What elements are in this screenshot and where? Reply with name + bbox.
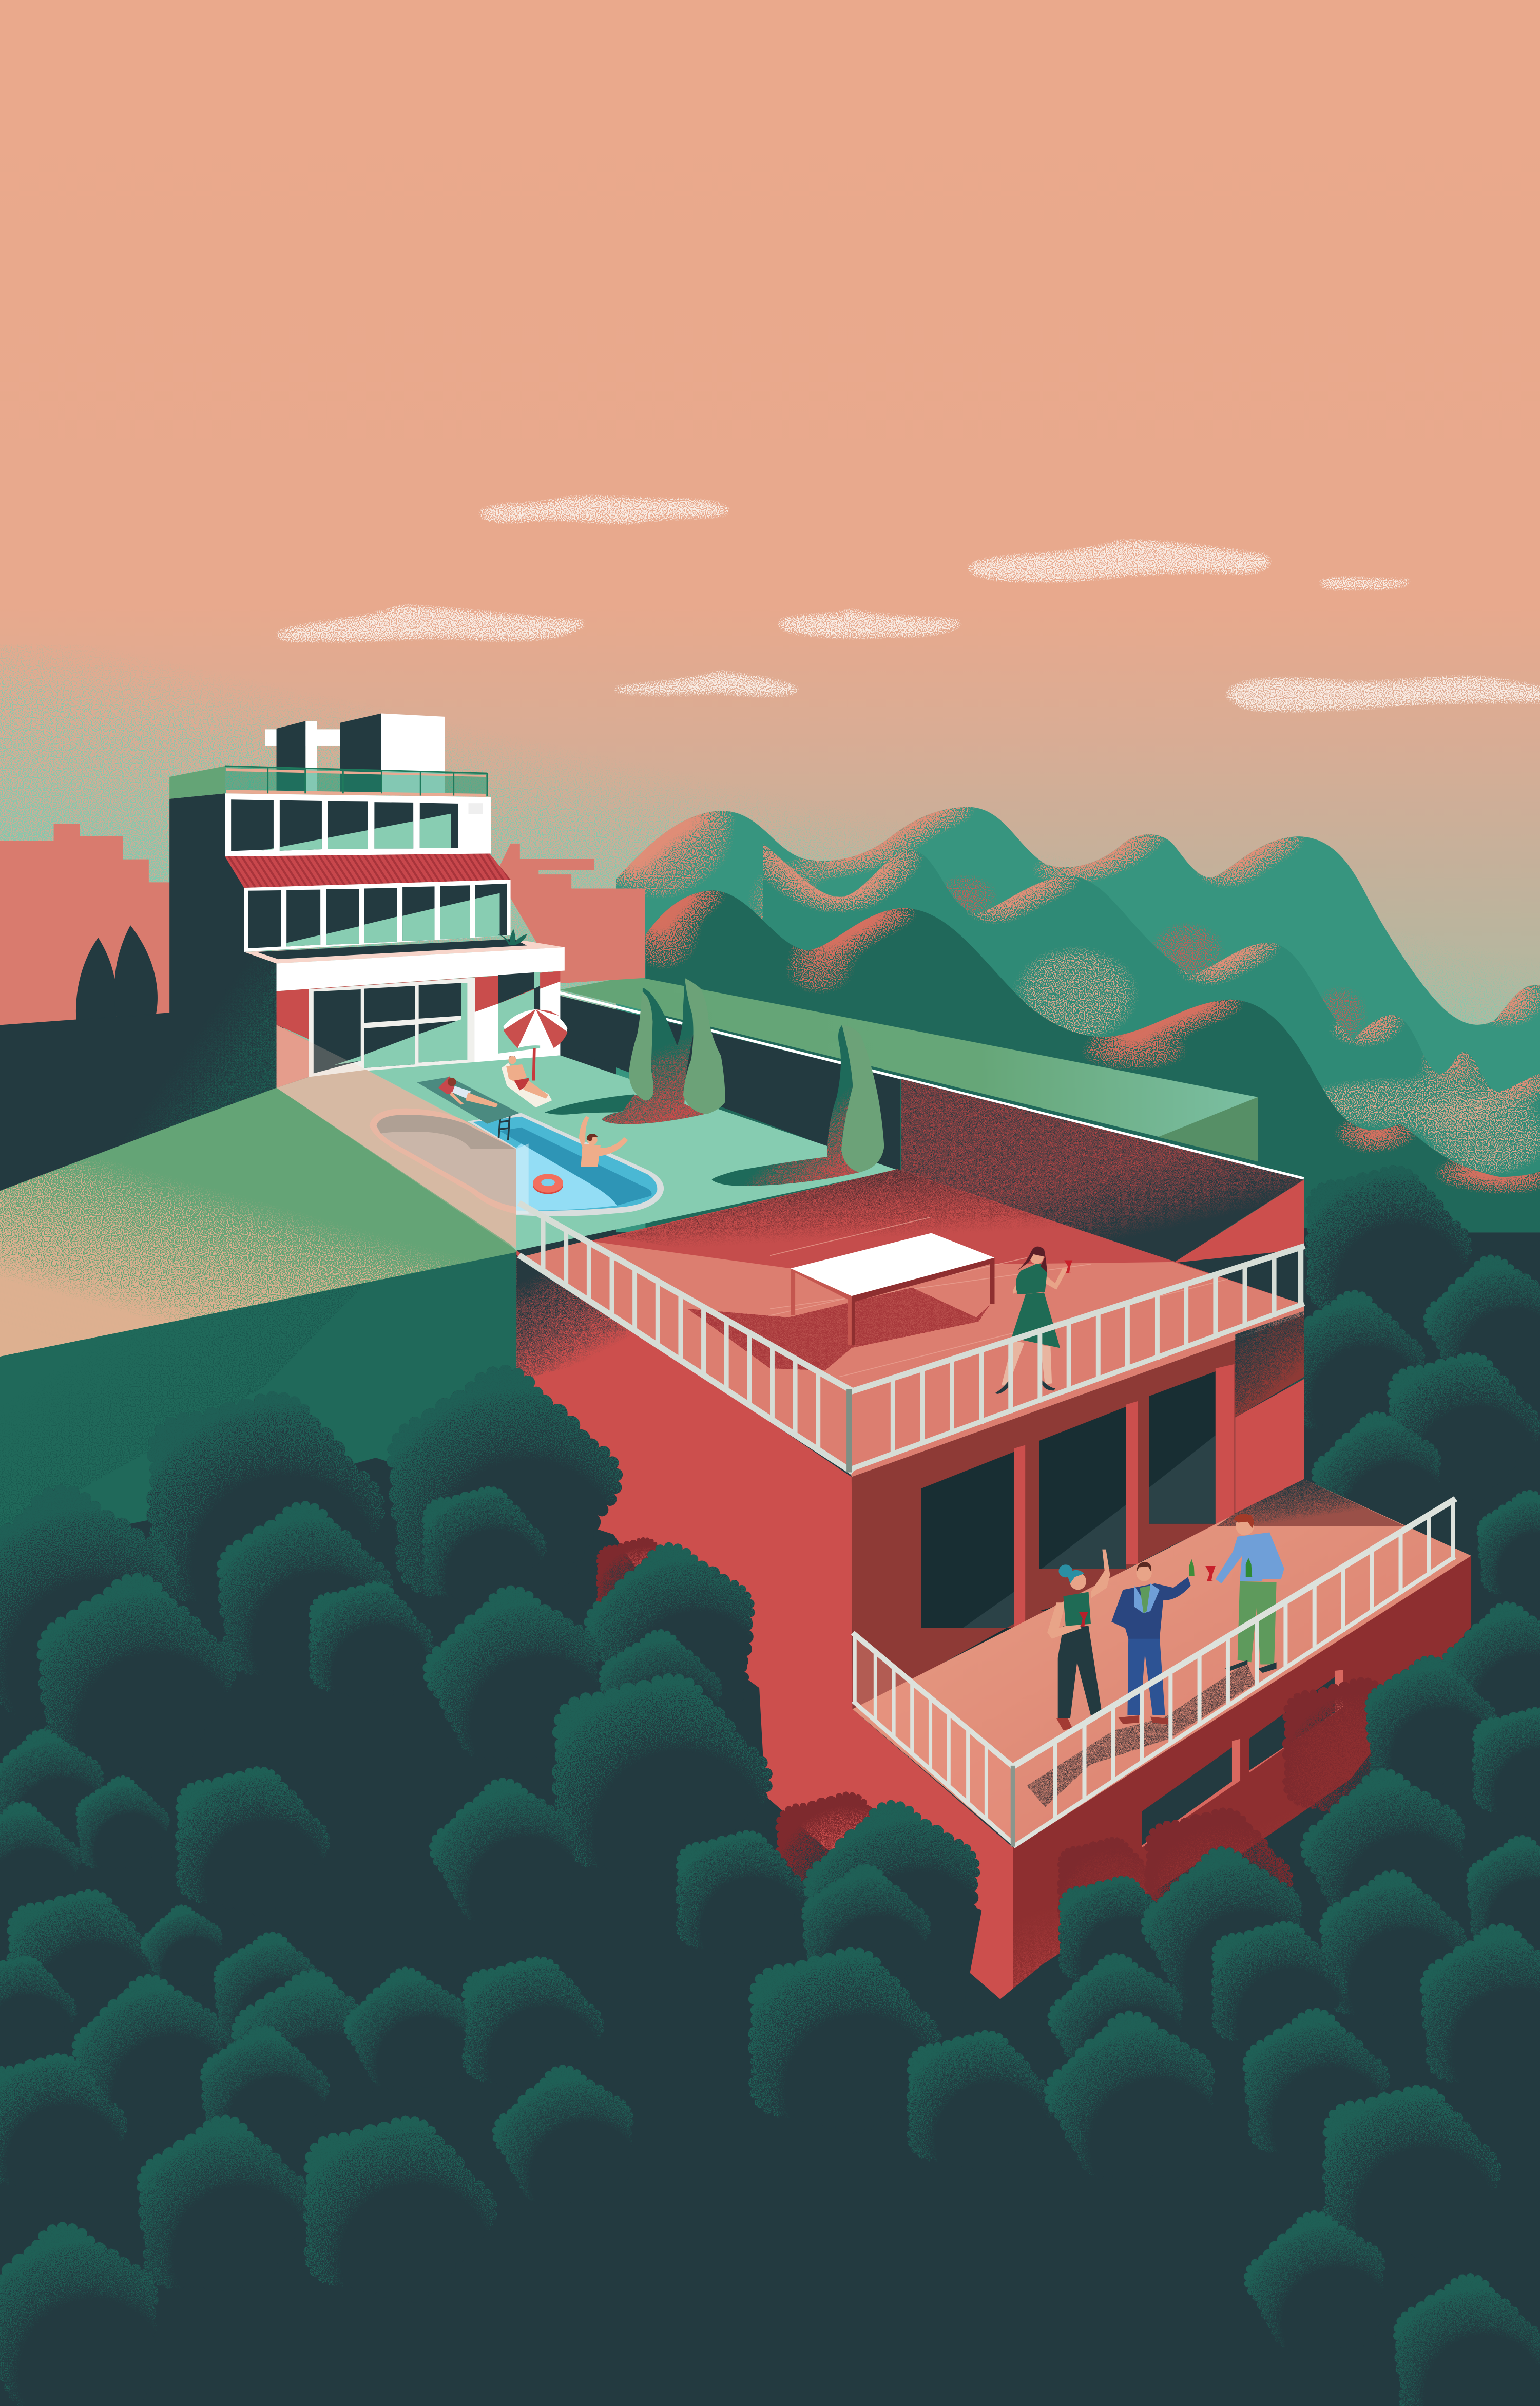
balcony floor xyxy=(853,1479,1471,1847)
pool ladder xyxy=(498,1113,510,1140)
foreground forest: right side, lower xyxy=(907,1583,1540,2406)
ceiling shadow xyxy=(1235,1311,1304,1418)
sandy glass-covered terrace over lawn xyxy=(277,1070,516,1248)
foreground dark base of forest xyxy=(0,1458,1540,2406)
table shadow xyxy=(687,1288,990,1370)
life ring xyxy=(533,1174,563,1194)
roof glass railing xyxy=(225,766,487,797)
garden back wall xyxy=(560,996,900,1174)
large dark windows xyxy=(921,1371,1216,1675)
balcony underside xyxy=(1013,1556,1471,2010)
green slope below lawn xyxy=(0,1251,517,1627)
mountain range xyxy=(609,807,1540,1232)
lower windows xyxy=(1142,1670,1343,1847)
house side wall xyxy=(0,793,277,1189)
back garden lawn xyxy=(560,976,1258,1161)
terrace back wall dark stippled xyxy=(901,1079,1304,1262)
pale glass panel xyxy=(277,1025,516,1250)
foreground forest: left side, upper xyxy=(0,1333,801,1965)
middle cypress xyxy=(683,978,725,1114)
coral building behind house xyxy=(496,844,645,983)
left red wall xyxy=(516,1250,1013,2010)
corrugated red awning xyxy=(225,853,511,888)
garden wall white coping xyxy=(560,993,1304,1178)
glass panel of balcony side xyxy=(855,1634,1013,1843)
woman with teal hair and wine xyxy=(1047,1550,1110,1730)
ghost pool behind glass xyxy=(370,1109,516,1214)
woman in green dress on terrace xyxy=(995,1247,1072,1394)
roof garden xyxy=(169,766,225,799)
roof volumes xyxy=(265,714,445,795)
sunbathing man xyxy=(506,1056,548,1099)
sun lounger xyxy=(502,1062,552,1107)
right red wall xyxy=(1235,1379,1304,1513)
foreground forest: centre xyxy=(676,1777,1027,2135)
garden cypress trees and their shadows xyxy=(545,978,884,1186)
left cypress xyxy=(629,992,653,1100)
distant coral city silhouette, left xyxy=(0,824,172,1028)
dark inner foliage and shadow of right cypress xyxy=(712,1025,860,1186)
foreground forest: red-lit canopy against the building xyxy=(596,1537,1431,1952)
terrace railing xyxy=(522,1205,1302,1471)
patio table xyxy=(791,1233,994,1345)
terrace floor xyxy=(522,1169,1304,1477)
planter plant xyxy=(496,929,527,945)
end face of back garden xyxy=(1158,1097,1258,1161)
swimmer in pool xyxy=(579,1116,628,1167)
pillars xyxy=(1014,1364,1234,1628)
floor shadows of party guests xyxy=(1027,1662,1256,1807)
dark hillside, left xyxy=(0,1013,284,1191)
building main volume in balcony coordinates xyxy=(516,1079,1471,2010)
dark inner foliage of left cypresses xyxy=(602,978,705,1124)
grass lawn xyxy=(0,1086,517,1357)
dark tree mass right of the building xyxy=(1304,1228,1540,1841)
shadow of left cypress xyxy=(545,1094,636,1115)
ground floor facade xyxy=(277,971,560,1088)
house and pool deck xyxy=(0,714,897,1251)
first-floor recessed wall xyxy=(852,1315,1304,1709)
plank lines xyxy=(724,1217,1228,1377)
towel xyxy=(417,1077,519,1124)
forest behind the building, upper right xyxy=(1246,1165,1540,1625)
swimming pool xyxy=(467,1113,664,1216)
dark cypress trees, left xyxy=(76,925,158,1025)
beach umbrella xyxy=(504,1009,567,1081)
terrace side wall xyxy=(1173,1180,1304,1263)
pool deck xyxy=(356,1055,897,1251)
second floor with windows xyxy=(244,880,511,952)
foreground forest: left side, lower xyxy=(0,1889,671,2406)
balcony railing xyxy=(855,1500,1453,1845)
man with shirt and green trousers xyxy=(1205,1514,1284,1673)
sky background xyxy=(0,0,1540,1043)
clouds xyxy=(275,496,1540,712)
sunbathing woman xyxy=(438,1076,498,1107)
man in blue suit xyxy=(1111,1559,1195,1724)
right cypress xyxy=(841,1025,884,1172)
planter slab xyxy=(244,939,565,991)
top floor with windows xyxy=(225,793,491,856)
